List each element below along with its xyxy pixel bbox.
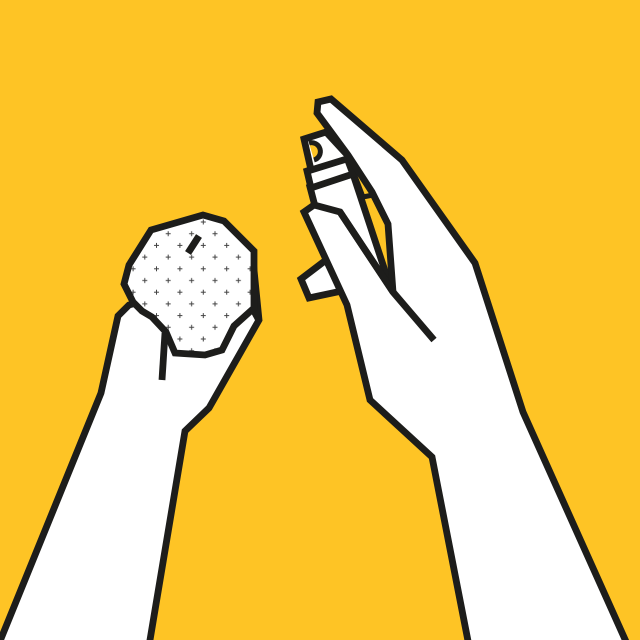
- wedge between apple and palm: [250, 255, 261, 322]
- palm and index finger: [304, 99, 628, 640]
- small finger behind: [301, 260, 342, 298]
- bottle trigger: [352, 160, 373, 197]
- bottle nozzle: [304, 132, 350, 170]
- bottle body: [310, 174, 392, 292]
- apple stem: [188, 236, 199, 253]
- finger line: [162, 333, 165, 380]
- bottle collar: [307, 158, 353, 188]
- hand holding spray bottle: [301, 99, 628, 640]
- hand holding apple: [0, 215, 261, 640]
- nozzle opening: [309, 143, 320, 160]
- forearm and palm: [0, 270, 259, 640]
- apple: [124, 215, 254, 355]
- nozzle opening outline: [309, 143, 320, 160]
- palm crease: [340, 212, 434, 340]
- spray bottle: [304, 132, 392, 292]
